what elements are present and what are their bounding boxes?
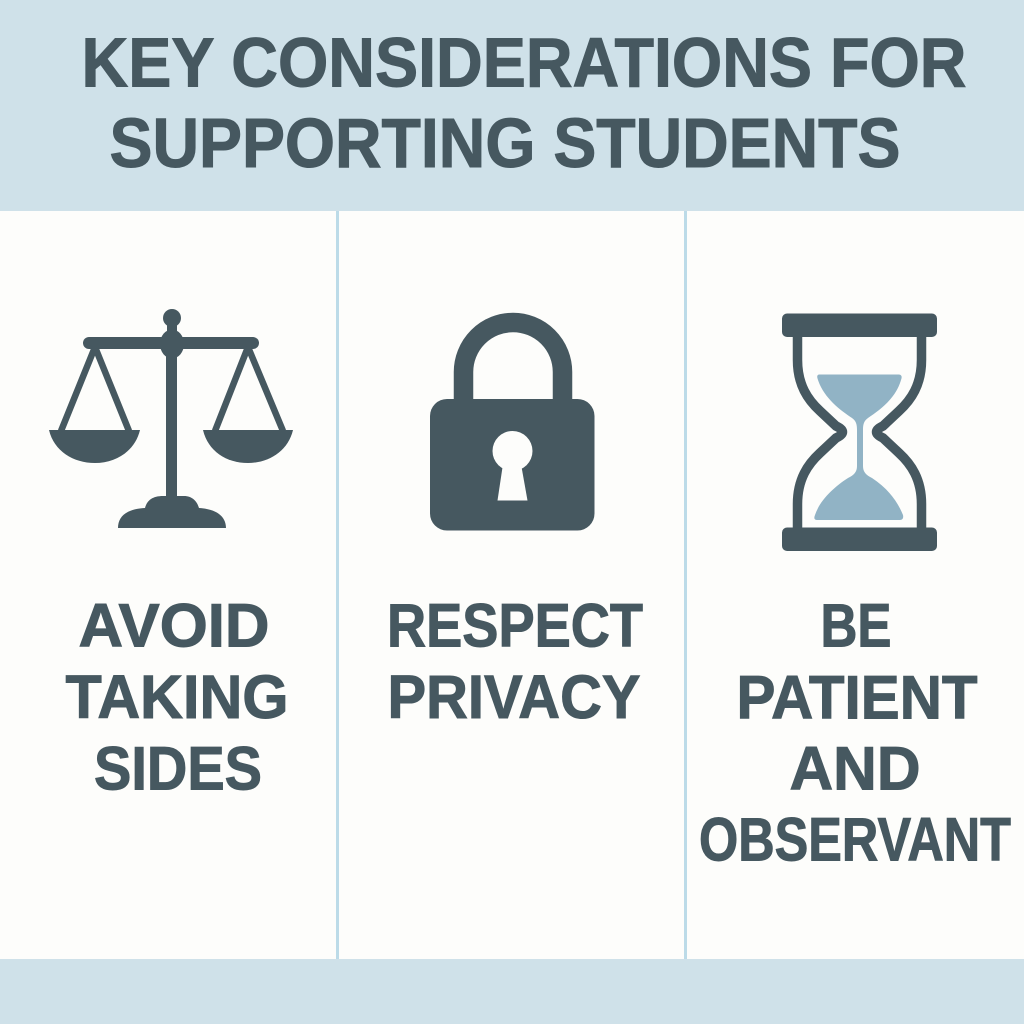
panel: be patient and observant	[699, 314, 1011, 874]
label: SIDES	[94, 734, 262, 802]
label: PATIENT	[736, 664, 978, 732]
icon: padlock	[430, 322, 594, 530]
sand	[814, 374, 903, 520]
footer band	[0, 959, 1024, 1024]
icon: hourglass	[782, 314, 937, 551]
title	[82, 24, 966, 182]
label	[66, 592, 288, 802]
glass frame	[798, 335, 922, 530]
label: AND	[790, 734, 920, 802]
column divider left	[336, 211, 339, 959]
label: TAKING	[66, 663, 288, 731]
label	[387, 592, 643, 731]
panel: respect privacy	[387, 322, 643, 731]
title: KEY CONSIDERATIONS FOR	[82, 24, 966, 102]
column divider right	[684, 211, 687, 959]
label: RESPECT	[387, 592, 643, 660]
label: AVOID	[78, 592, 270, 660]
label: PRIVACY	[388, 663, 640, 731]
title: SUPPORTING STUDENTS	[110, 104, 900, 182]
label: BE	[820, 592, 892, 660]
icon: balance scales	[49, 309, 293, 528]
label	[699, 592, 1011, 874]
header band	[0, 0, 1024, 211]
panel: avoid taking sides	[49, 309, 293, 802]
